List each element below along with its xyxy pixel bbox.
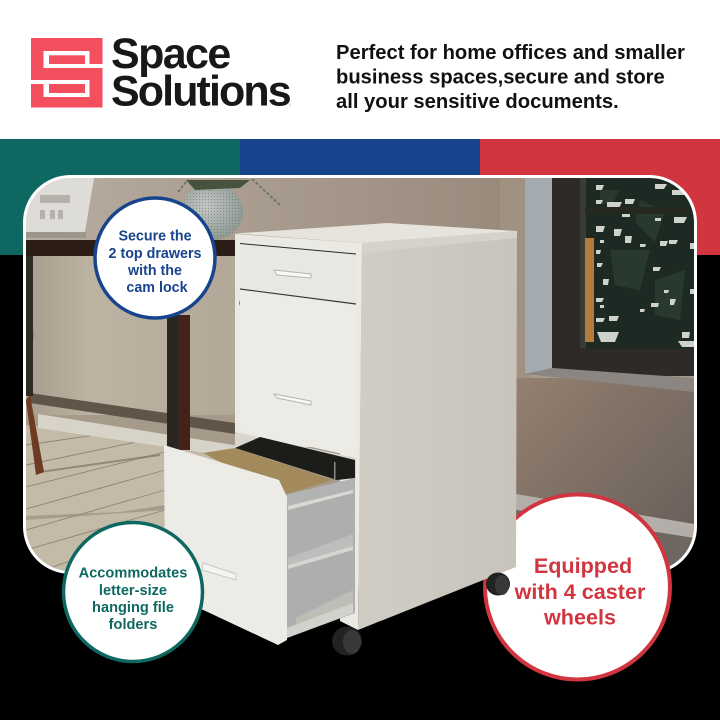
drawer handle [274, 270, 311, 278]
callout: cam lock: with the [127, 263, 182, 279]
filing cabinet [164, 223, 517, 656]
callout: hanging file folders: Accommodates [79, 566, 187, 582]
callout: caster wheels: with 4 caster [514, 579, 646, 604]
photo panel: office room [20, 176, 696, 572]
callout: caster wheels: wheels [543, 604, 616, 630]
icon: cam lock [240, 300, 246, 306]
callout: cam lock [95, 198, 215, 318]
callout: cam lock: cam lock [126, 280, 188, 296]
back wall [26, 178, 694, 571]
chair leg [26, 395, 44, 475]
tagline text: all your sensitive documents. [336, 91, 619, 113]
callout: hanging file folders: hanging file [92, 600, 174, 616]
top drawer [240, 244, 356, 304]
callout: cam lock: 2 top drawers [109, 246, 202, 262]
tagline text: Perfect for home offices and smaller [336, 42, 685, 64]
window glass with tree [585, 178, 695, 349]
caster wheels [332, 572, 510, 656]
window reveal [525, 178, 553, 373]
header background [0, 0, 720, 139]
logo: Space Solutions: . [289, 102, 291, 108]
logo: Space Solutions [31, 30, 291, 116]
right wall [516, 378, 694, 538]
middle drawer [240, 290, 356, 457]
panel border [24, 176, 696, 572]
baseboard right [516, 494, 694, 538]
baseboard left [38, 414, 235, 452]
icon: S logo mark [31, 38, 102, 108]
callout: caster wheels [485, 494, 670, 680]
window frame [552, 178, 694, 376]
cabinet side [358, 231, 517, 630]
logo: Space Solutions: Solutions [111, 68, 291, 116]
callout: hanging file folders: letter-size [99, 583, 167, 599]
floor planks [26, 430, 165, 571]
colour band: teal, blue, red [0, 139, 720, 255]
desk top and legs [26, 240, 236, 256]
callout: cam lock: Secure the [118, 228, 192, 244]
cabinet front [235, 234, 362, 630]
cabinet top [235, 223, 517, 243]
tagline text [336, 42, 685, 113]
drawer handle [274, 394, 311, 405]
vase with plant [178, 179, 280, 240]
open drawer front [164, 445, 287, 645]
callout: hanging file folders: folders [109, 617, 157, 633]
open drawer interior [203, 432, 356, 638]
callout: caster wheels: Equipped [534, 553, 632, 578]
notebook [26, 178, 94, 232]
logo wordmark: Space [111, 30, 230, 78]
tagline text: business spaces,secure and store [336, 66, 665, 88]
window sill [525, 368, 694, 392]
floor [26, 425, 240, 571]
callout: hanging file folders [64, 522, 202, 662]
drawer handle [202, 563, 236, 580]
